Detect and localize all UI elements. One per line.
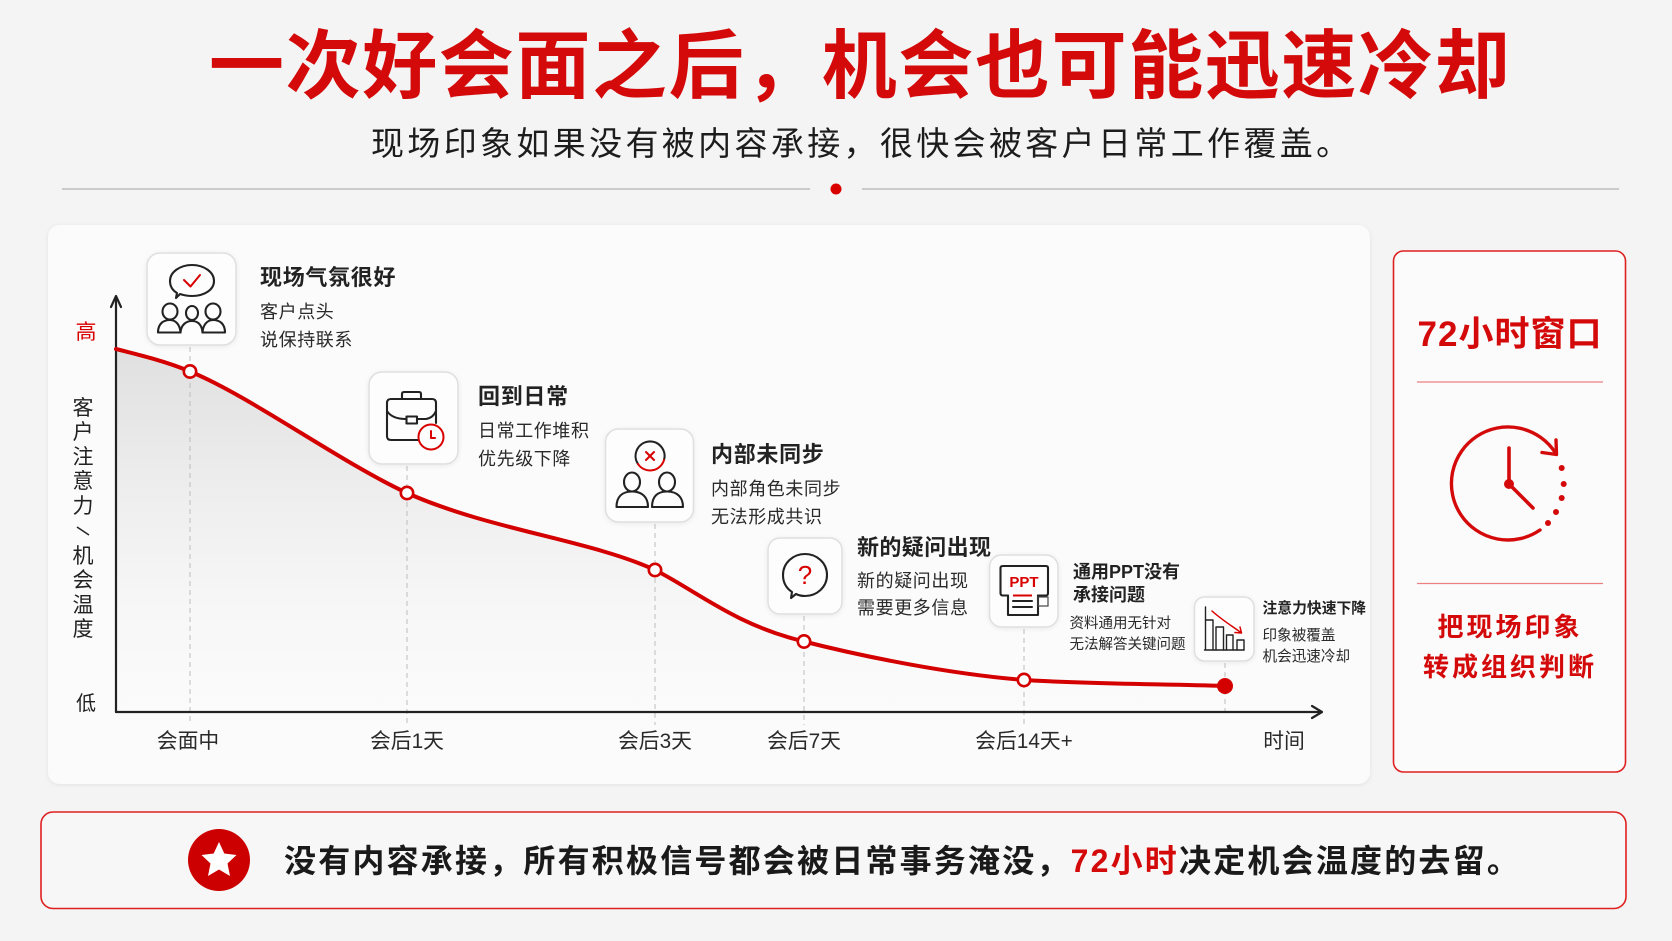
event: internal not aligned: [606, 429, 841, 527]
y axis label: low: 低: [76, 692, 96, 715]
heading: 通用PPT没有: [1073, 562, 1180, 582]
curve markers: [184, 365, 1233, 694]
x axis labels: 会面中: [157, 730, 219, 753]
x axis labels: 会后1天: [370, 730, 444, 753]
panel takeaway: 转成组织判断: [1423, 652, 1597, 682]
y axis title: 客: [72, 397, 94, 420]
panel: attention decay chart: [48, 225, 1370, 784]
y axis label: high: 高: [76, 321, 96, 344]
attention curve: [116, 349, 1225, 686]
y axis title: 会: [72, 569, 94, 592]
description: [711, 479, 841, 527]
y axis title: 户: [72, 421, 94, 444]
y axis title: 机: [72, 545, 94, 568]
description: 机会迅速冷却: [1262, 648, 1350, 665]
bottom callout banner: [41, 812, 1626, 908]
axes: [111, 296, 1322, 718]
y axis title: [72, 397, 94, 641]
x axis labels: [157, 730, 1305, 753]
description: [1070, 615, 1186, 653]
panel takeaway: [1423, 612, 1597, 682]
area under curve: [116, 349, 1225, 712]
icon: briefcase with clock: [369, 372, 458, 464]
x axis labels: 会后3天: [618, 730, 692, 753]
icon: red star badge: [188, 829, 250, 891]
event: attention drops fast: [1194, 597, 1366, 665]
description: 内部角色未同步: [711, 479, 841, 499]
description: 印象被覆盖: [1262, 627, 1335, 644]
heading: 回到日常: [478, 384, 569, 409]
header divider with red dot: [62, 184, 1619, 194]
description: 优先级下降: [478, 449, 571, 469]
subtitle: 现场印象如果没有被内容承接，很快会被客户日常工作覆盖。: [371, 125, 1352, 162]
description: 说保持联系: [260, 330, 353, 350]
event: new questions: [768, 535, 991, 618]
description: [1262, 627, 1350, 665]
heading: 内部未同步: [711, 442, 825, 467]
heading: 新的疑问出现: [857, 535, 991, 560]
icon: clock with countdown arrow: [1451, 427, 1567, 540]
description: 资料通用无针对: [1070, 615, 1171, 632]
description: [857, 571, 969, 618]
description: 日常工作堆积: [478, 421, 590, 441]
icon: question bubble: ?: [798, 560, 812, 590]
heading: [1073, 562, 1180, 605]
icon: PPT document printer: PPT: [1009, 574, 1039, 591]
x axis labels: 会后14天+: [975, 730, 1073, 753]
description: 无法解答关键问题: [1070, 636, 1186, 653]
x axis labels: 时间: [1263, 730, 1305, 753]
icon: question bubble: [768, 538, 842, 614]
y axis title: 意: [72, 470, 94, 493]
heading: 现场气氛很好: [260, 265, 396, 290]
dashed time guides: [190, 347, 1225, 725]
icon: PPT document printer: [990, 555, 1058, 627]
icon: two people with red cross: [606, 429, 694, 522]
panel heading: 72小时窗口: [1418, 315, 1602, 354]
event: atmosphere good: [147, 253, 396, 350]
y axis title: 度: [72, 618, 94, 641]
event: back to routine: [369, 372, 590, 469]
description: 新的疑问出现: [857, 571, 969, 591]
icon: chat bubble check and audience: [147, 253, 236, 345]
description: [478, 421, 590, 469]
panel: 72 hour window: [1394, 251, 1626, 772]
description: 需要更多信息: [857, 598, 969, 618]
callout text: 没有内容承接，所有积极信号都会被日常事务淹没，72小时决定机会温度的去留。: [284, 843, 1521, 879]
y axis title: 力: [72, 495, 94, 518]
icon: falling bar chart: [1194, 597, 1254, 661]
y axis title: 温: [72, 594, 94, 617]
heading: 注意力快速下降: [1262, 599, 1366, 617]
description: 客户点头: [260, 302, 334, 322]
x axis labels: 会后7天: [767, 730, 841, 753]
panel takeaway: 把现场印象: [1437, 612, 1583, 642]
description: 无法形成共识: [711, 507, 823, 527]
description: [260, 302, 353, 350]
event: generic PPT cannot answer: [990, 555, 1186, 653]
y axis title: 注: [72, 446, 94, 469]
heading: 承接问题: [1073, 585, 1145, 605]
title: 一次好会面之后，机会也可能迅速冷却: [209, 24, 1511, 108]
